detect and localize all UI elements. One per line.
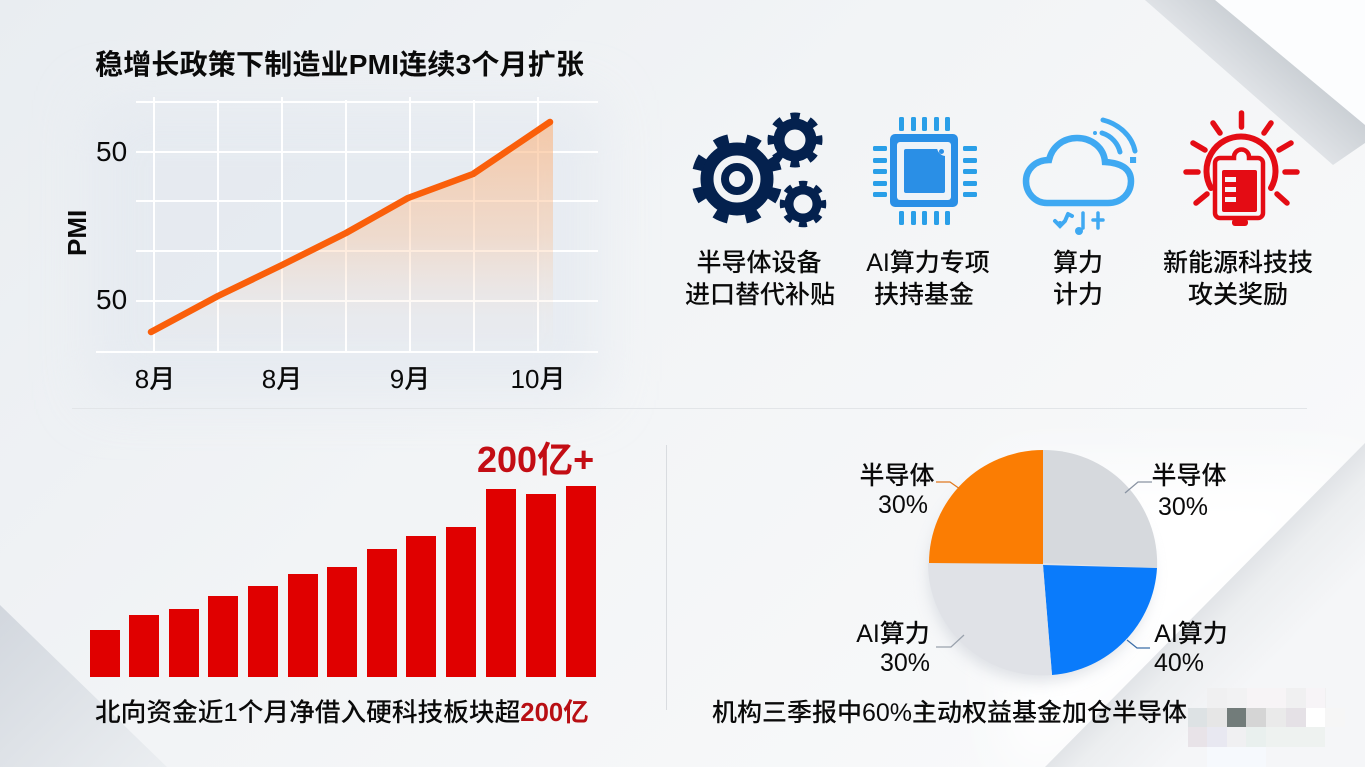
x tick labels: 10月 (511, 364, 565, 394)
line chart: PMI (62, 97, 598, 394)
y tick labels: 50 (96, 136, 127, 167)
icon: gears (684, 116, 824, 232)
x tick labels (135, 364, 565, 394)
icon labels: AI算力专项 (866, 249, 990, 277)
area under line (151, 121, 553, 352)
caption: northbound funds: 北向资金近1个月净借入硬科技板块超200亿 (95, 698, 589, 727)
y tick labels: 50 (96, 284, 127, 315)
icon labels: 算力 (1053, 249, 1103, 277)
pie labels: 40% (1154, 649, 1204, 677)
caption: institutional funds: 机构三季报中60%主动权益基金加仓半导体 (712, 699, 1187, 727)
pie labels: 半导体 (1151, 462, 1227, 490)
pie labels: AI算力 (856, 620, 930, 648)
y axis label: PMI (62, 210, 92, 256)
pie labels: 30% (878, 491, 928, 519)
bar chart: northbound funds (90, 486, 596, 677)
x tick labels: 8月 (135, 364, 175, 394)
icon labels: 计力 (1053, 281, 1103, 309)
pie chart: fund allocation (856, 450, 1228, 682)
icon: cloud computing (1026, 120, 1135, 235)
pie labels (856, 462, 1228, 677)
pie labels: 30% (1158, 493, 1208, 521)
icon labels (685, 249, 1313, 309)
x tick labels: 9月 (390, 364, 430, 394)
watermark mosaic (1188, 688, 1345, 767)
icon labels: 进口替代补贴 (685, 281, 835, 309)
callout: 200亿+: 200亿+ (477, 439, 594, 480)
icon labels: 攻关奖励 (1188, 281, 1288, 309)
pie labels: 半导体 (859, 462, 935, 490)
icon labels: 新能源科技技 (1163, 249, 1313, 277)
title: 稳增长政策下制造业PMI连续3个月扩张 (95, 49, 584, 80)
y tick labels (96, 136, 127, 315)
x tick labels: 8月 (262, 364, 302, 394)
icon: AI chip (873, 117, 977, 225)
pie leader lines (936, 482, 1152, 648)
PMI line (151, 122, 550, 332)
pie labels: AI算力 (1154, 620, 1228, 648)
icon: new energy bulb (1186, 113, 1297, 226)
icon labels: 半导体设备 (696, 249, 822, 277)
pie labels: 30% (880, 649, 930, 677)
icon labels: 扶持基金 (874, 281, 974, 309)
